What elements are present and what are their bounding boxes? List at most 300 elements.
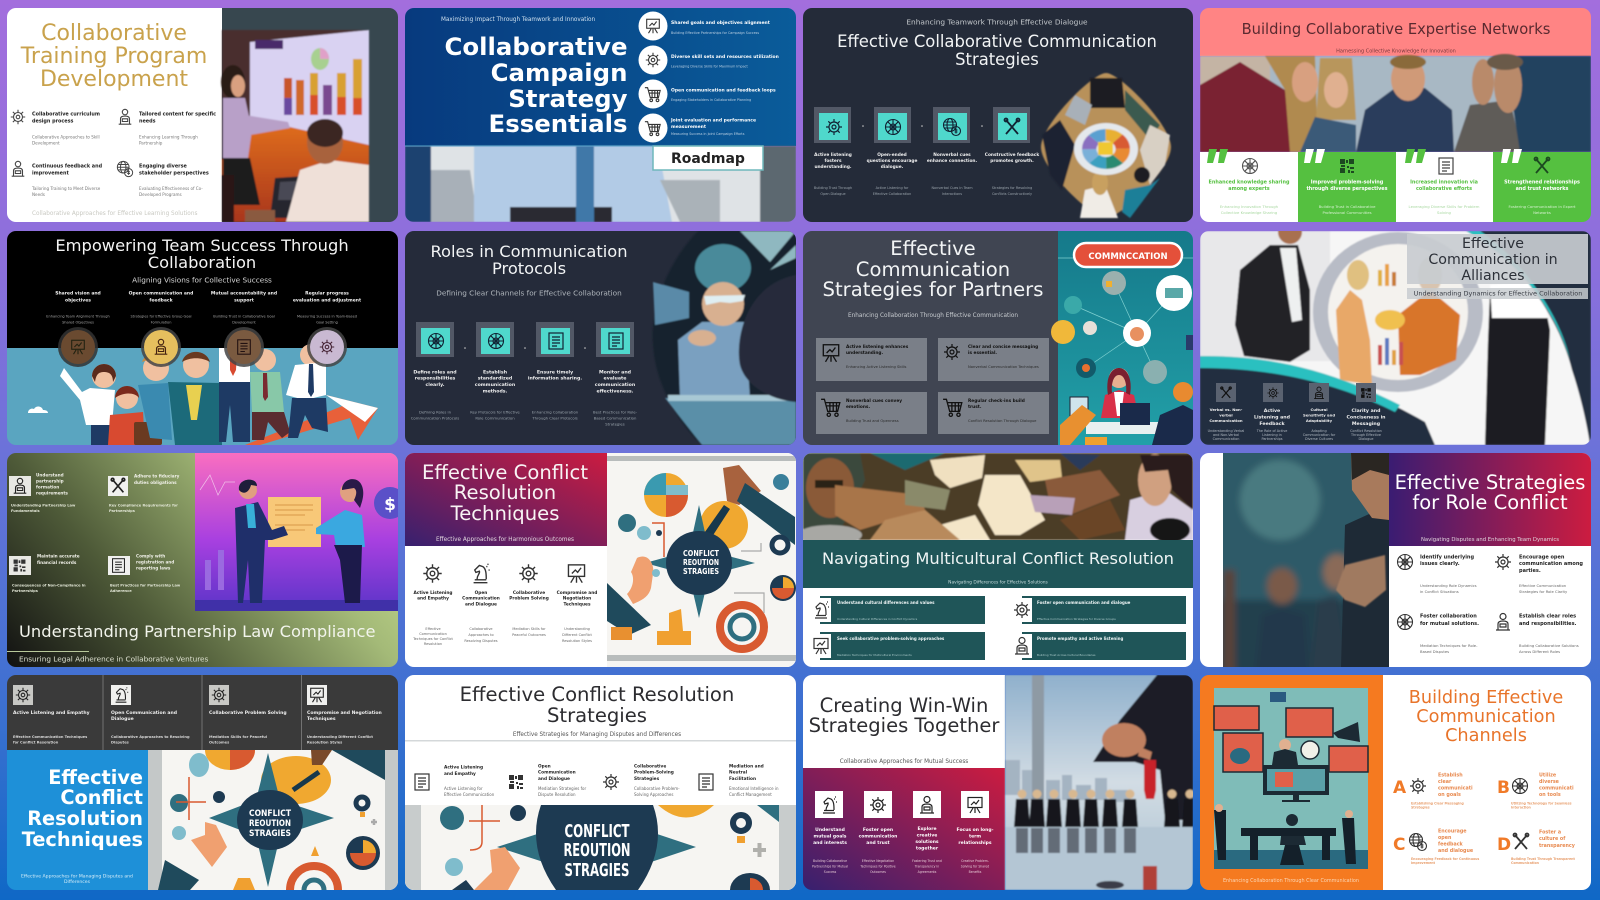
column text: Nonverbal Cues in Team (931, 186, 973, 190)
compliance items: partnership (36, 478, 64, 484)
column text: Shared Objectives (62, 320, 94, 324)
compliance items: Fundamentals (11, 509, 40, 513)
subtitle: Effective Strategies for Managing Disputes and Differences (513, 732, 681, 738)
card 16: Building Effective Communication Channels (1200, 675, 1591, 890)
strategy boxes: is essential. (968, 350, 997, 356)
quote panels: Improved problem-solving (1311, 180, 1384, 186)
feature list: Enhancing Learning Through (139, 134, 198, 140)
strategy items: and Empathy (444, 771, 476, 777)
column text: communication (475, 382, 515, 388)
technique columns: Collaborative (469, 627, 493, 631)
column text: Monitor and (599, 370, 631, 376)
technique columns: Resolution Styles (562, 639, 592, 643)
technique columns: Communication (462, 596, 500, 602)
roadmap sign (653, 146, 763, 170)
column items: Clarity and (1352, 408, 1380, 414)
column items: Verbal vs. Non- (1210, 407, 1243, 412)
subtitle bar (1407, 288, 1588, 299)
gradient panel with items: Benefits (969, 870, 982, 874)
column items: The Role of Active (1256, 429, 1287, 433)
title: Strategy (508, 84, 628, 113)
strategy bars (811, 596, 1186, 660)
strategy items: Active Listening for (444, 786, 483, 791)
column items: Adaptability (1306, 418, 1333, 423)
column text: Key Protocols for Effective (470, 410, 520, 414)
title: Communication (856, 258, 1010, 281)
feature list with circular icons: Diverse skill sets and resources utilization (671, 54, 779, 60)
column text (814, 152, 1039, 196)
card 8: Effective Communication in Alliances (1200, 220, 1591, 445)
quote panels: Leveraging Diverse Skills for Problem (1409, 204, 1480, 209)
compliance items: formation (36, 484, 59, 490)
strategy bars: Understanding Cultural Differences in Conflict Dynamics (837, 617, 918, 621)
quote panels: Solving (1437, 210, 1452, 215)
card 15: Creating Win-Win Strategies Together (803, 675, 1194, 890)
title: Effective Conflict (422, 461, 588, 484)
technique columns: Resolution (424, 642, 442, 646)
gradient panel with items: and trust (866, 840, 891, 846)
title: Strategies for Partners (823, 278, 1043, 301)
title box: Communication in (1428, 252, 1558, 268)
column items: Adapting (1311, 429, 1327, 433)
technique columns: Collaborative (513, 590, 545, 596)
title (20, 21, 207, 92)
strategy boxes: Nonverbal cues convey (846, 398, 902, 404)
title (422, 461, 588, 525)
illustration: conflict compass: STRAGIES (683, 567, 719, 576)
strategy items: Conflict Management (729, 792, 772, 797)
gradient panel with items: Partnerships for Mutual (812, 864, 848, 868)
lettered items: culture of (1539, 836, 1566, 842)
strategy boxes: Enhancing Active Listening Skills (846, 365, 907, 369)
column text (46, 290, 362, 324)
column text: Strategies (605, 422, 625, 426)
compliance items: Consequences of Non-Compliance in (12, 584, 86, 588)
lettered items: Building Trust Through Transparent (1511, 857, 1575, 861)
title (1409, 688, 1563, 746)
illustration: communication network (1051, 231, 1193, 445)
feature list: improvement (32, 170, 69, 176)
lettered items: Establishing Clear Messaging (1411, 802, 1464, 806)
title: Essentials (489, 109, 628, 138)
title (837, 32, 1157, 69)
lettered items: open (1438, 836, 1452, 841)
technique columns: Resolving Disputes (464, 639, 498, 643)
strategy items: Strategies for Role Clarity (1519, 590, 1568, 594)
column text: evaluation and adjustment (293, 298, 362, 304)
column items: Conflict Resolution (1350, 429, 1382, 433)
strategy bars: Foster open communication and dialogue (1037, 600, 1131, 605)
column text: Open communication and (129, 290, 193, 296)
top columns: Understanding Different Conflict (307, 735, 373, 739)
column text: Active listening (814, 152, 852, 158)
column text: Ensure timely (537, 370, 573, 376)
gradient panel with items: relationships (958, 840, 992, 846)
feature list with circular icons: Building Effective Partnerships for Campaign Success (671, 31, 759, 35)
gradient panel with items: Understand (815, 827, 845, 833)
feature list: Development (32, 140, 60, 146)
title: Techniques (450, 502, 559, 525)
illustration: cartoon team on arrow (28, 344, 378, 445)
goal icon badges (58, 327, 347, 367)
strategy items: for mutual solutions. (1420, 621, 1479, 627)
caption: Enhancing Collaboration Through Clear Communication (1223, 878, 1359, 884)
column text: support (234, 298, 255, 304)
technique columns: Techniques for Conflict (412, 637, 454, 641)
title (823, 237, 1043, 301)
strategy items: Strategies (634, 776, 660, 782)
communication pill sign: COMMNCCATION (1088, 252, 1168, 262)
strategy items: Building Collaborative Solutions (1519, 644, 1579, 648)
strategy boxes: emotions. (846, 404, 870, 410)
column text: Mutual accountability and (211, 290, 277, 296)
photo: woman with holographic helmet (653, 231, 796, 445)
top columns: Compromise and Negotiation (307, 710, 382, 716)
strategy boxes: Regular check-ins build (968, 398, 1025, 404)
top columns: Collaborative Approaches to Resolving (111, 735, 190, 739)
lettered items: on tools (1539, 792, 1561, 798)
column text: Formulation (151, 320, 171, 324)
feature list: Collaborative Approaches to Skill (32, 134, 100, 140)
strategy items: Foster collaboration (1420, 614, 1477, 620)
photo: colleagues around table (1200, 54, 1591, 152)
lettered items: on goals (1438, 792, 1461, 798)
title (56, 239, 348, 268)
header panel (1389, 453, 1591, 546)
column text: Through Clear Protocols (531, 416, 578, 420)
gradient panel with items: Creative Problem- (961, 859, 989, 863)
lettered items: Communication (1511, 861, 1540, 865)
column text: Building Trust Through (814, 186, 852, 190)
column text: Enhancing Team Alignment Through (46, 314, 110, 318)
blue title panel: Techniques (22, 828, 143, 851)
technique columns: and Empathy (417, 596, 449, 602)
technique columns: Techniques (563, 602, 591, 608)
column text: Role Communication (475, 416, 515, 420)
title: Understanding Partnership Law Compliance (19, 622, 376, 641)
column items: Listening and (1254, 414, 1290, 420)
feature list: needs (139, 118, 156, 124)
gradient panel with items: communication (859, 834, 897, 840)
top columns: Disputes (111, 740, 129, 744)
strategy boxes: Clear and concise messaging (968, 344, 1038, 350)
gradient panel with items: mutual goals (814, 834, 847, 840)
technique columns (412, 564, 597, 646)
lettered items: B (1497, 778, 1510, 798)
quote panels: Collective Knowledge Sharing (1221, 210, 1278, 215)
strategy items: Effective Communication (1519, 584, 1567, 588)
column text: Based Communication (594, 416, 637, 420)
blue title panel: Conflict (60, 786, 143, 809)
title box: Effective (1462, 236, 1524, 252)
title (432, 245, 626, 274)
strategy bars: Seek collaborative problem-solving approaches (837, 636, 945, 641)
feature list with circular icons: measurement (671, 124, 707, 130)
quote panels: collaborative efforts (1416, 186, 1472, 192)
title (809, 694, 1000, 737)
strategy boxes: trust. (968, 404, 982, 410)
quote panels: Professional Communities (1322, 210, 1372, 215)
gradient panel with items (803, 768, 1005, 890)
icon tiles (814, 107, 1030, 143)
gradient panel with items: creative (917, 832, 937, 838)
feature list: stakeholder perspectives (139, 170, 209, 176)
gradient panel with items: and interests (813, 840, 847, 846)
illustration: handshake over agreement (195, 453, 406, 611)
column items: Cultural (1310, 407, 1328, 412)
strategy items: Facilitation (729, 776, 756, 782)
column text: Measuring Success in Team-Based (297, 314, 357, 318)
subtitle: Enhancing Collaboration Through Effective Communication (848, 313, 1018, 319)
quote panels: Networks (1533, 210, 1551, 215)
compliance items: Key Compliance Requirements for (109, 504, 178, 508)
column text: Open-ended (877, 152, 907, 158)
column text: Strategies for Resolving (992, 186, 1032, 190)
communication pill sign (1074, 243, 1182, 267)
title: Creating Win-Win (820, 694, 988, 717)
column text: Goal Setting (316, 320, 338, 324)
compliance items: Adherence (110, 589, 132, 593)
column text: Open Dialogue (820, 192, 846, 196)
lettered items: Improvement (1411, 861, 1436, 865)
column text: effectiveness. (597, 388, 634, 394)
lettered items: Foster a (1539, 830, 1561, 836)
illustration: handshake over agreement: $ (384, 495, 396, 515)
column items: Diverse Cultures (1305, 437, 1333, 441)
column items: and Non-Verbal (1213, 433, 1239, 437)
compliance items (9, 472, 181, 593)
feature list with circular icons (638, 12, 779, 142)
title: for Role Conflict (1412, 491, 1568, 514)
feature list with circular icons: Shared goals and objectives alignment (671, 20, 771, 26)
photo: team circle around wheel (1041, 73, 1171, 218)
column text: promotes growth. (990, 158, 1034, 164)
lettered items: Interaction (1511, 806, 1532, 810)
strategy bars: Understand cultural differences and values (837, 600, 935, 605)
top columns (13, 675, 382, 750)
feature list (11, 109, 216, 197)
column items: Communication (1213, 437, 1239, 441)
technique columns: Effective (425, 627, 441, 631)
column text: Active Listening for (876, 186, 909, 190)
quote panels: Enhancing Innovation Through (1220, 204, 1279, 209)
strategy items: communication among (1519, 561, 1583, 567)
title band: Navigating Multicultural Conflict Resolution (822, 549, 1174, 568)
lettered items: Strategies (1411, 806, 1430, 810)
card 14: Effective Conflict Resolution Strategies (405, 675, 796, 890)
column text: fosters (824, 158, 842, 164)
illustration: enlarged conflict compass (405, 805, 796, 890)
technique columns: and Dialogue (465, 602, 497, 608)
quote panels: Strengthened relationships (1504, 180, 1580, 186)
illustration: conflict compass: STRAGIES (249, 829, 291, 839)
illustration: control room of screens (1214, 688, 1368, 869)
title: Communication (1416, 707, 1556, 727)
gradient panel with items: Transparency in (914, 864, 939, 868)
title band: Navigating Differences for Effective Solutions (948, 580, 1049, 586)
strategy items: Communication (538, 770, 576, 776)
lettered items: C (1393, 835, 1405, 855)
title: Collaboration (148, 253, 256, 272)
strategy items (1398, 554, 1583, 654)
top columns: Collaborative Problem Solving (209, 710, 287, 716)
strategy boxes: Building Trust and Openness (846, 419, 899, 423)
column items: Sensitivity and (1303, 412, 1335, 418)
strategy boxes: Conflict Resolution Through Dialogue (968, 419, 1037, 423)
card 13: Effective Conflict Resolution Techniques, blue variant (7, 675, 398, 890)
top columns: Effective Communication Techniques (13, 735, 87, 739)
strategy items: Across Different Roles (1519, 650, 1560, 654)
title (460, 683, 734, 727)
strategy items: Dispute Resolution (538, 792, 576, 797)
column text: clearly. (425, 382, 445, 388)
quote panels: and trust networks (1516, 186, 1568, 192)
column items: Conciseness in (1346, 414, 1386, 420)
column text: enhance connection. (927, 158, 977, 164)
strategy items: Mediation and (729, 764, 764, 770)
title: Campaign (491, 58, 628, 87)
strategy items: Collaborative (634, 764, 666, 770)
card 3: Effective Collaborative Communication Strategies (803, 8, 1193, 222)
strategy items: parties. (1519, 568, 1541, 574)
title: Collaborative (41, 21, 187, 46)
strategy items: Solving Approaches (634, 792, 673, 797)
column items: Messaging (1352, 421, 1380, 427)
strategy items (415, 764, 779, 797)
compliance items: Understand (36, 472, 64, 478)
gradient panel with items: Success (824, 870, 837, 874)
feature list: Tailoring Training to Meet Diverse (31, 186, 101, 191)
subtitle: Aligning Visions for Collective Success (132, 276, 272, 284)
strategy boxes: Nonverbal Communication Techniques (968, 365, 1039, 369)
strategy items: Emotional Intelligence in (729, 786, 779, 791)
column text: Development (232, 320, 256, 324)
strategy items: Understanding Role Dynamics (1420, 584, 1477, 588)
title: Building Effective (1409, 688, 1563, 708)
column text: Best Practices for Role- (593, 410, 638, 414)
strategy bars: Promote empathy and active listening (1037, 636, 1123, 641)
subtitle: Enhancing Teamwork Through Effective Dialogue (906, 18, 1088, 26)
top columns: for Conflict Resolution (13, 740, 59, 744)
title (1395, 471, 1585, 514)
gradient panel with items: Building Collaborative (813, 859, 847, 863)
strategy items: Establish clear roles (1519, 614, 1576, 620)
title: Strategies Together (809, 714, 1000, 737)
strategy bars: Building Trust Across Cultural Boundaries (1037, 653, 1096, 657)
subtitle: Maximizing Impact Through Teamwork and Innovation (441, 17, 596, 23)
lettered items: communicati (1539, 786, 1574, 792)
lettered items (1393, 772, 1576, 865)
quote panels: Fostering Communication in Expert (1508, 204, 1576, 209)
column text: Shared vision and (55, 290, 101, 296)
lettered items: Utilize (1539, 772, 1557, 778)
technique columns: Problem Solving (509, 596, 549, 602)
column text: understanding. (814, 164, 852, 170)
column text: responsibilities (415, 376, 455, 382)
technique columns: Negotiation (563, 596, 591, 602)
column text: Defining Roles in (419, 410, 452, 414)
strategy items: issues clearly. (1420, 561, 1460, 567)
column items: verbal (1219, 412, 1233, 418)
illustration: conflict compass (148, 750, 398, 890)
strategy items: Based Disputes (1420, 650, 1449, 654)
strategy items: in Conflict Situations (1420, 590, 1459, 594)
lettered items: diverse (1539, 779, 1560, 785)
illustration: conflict compass: CONFLICT (249, 809, 292, 819)
column text: Regular progress (305, 290, 349, 296)
quote panels: Increased innovation via (1410, 180, 1478, 186)
strategy items: Active Listening (444, 764, 483, 770)
lettered items: communicati (1438, 786, 1473, 792)
gradient panel with items: Explore (917, 826, 937, 832)
technique columns: Compromise and (557, 590, 597, 596)
title: Development (40, 67, 188, 92)
top columns: Mediation Skills for Peaceful (209, 735, 267, 739)
title: Roles in Communication (430, 242, 628, 261)
column items: Understanding Verbal (1208, 429, 1244, 433)
top columns: Techniques (307, 716, 336, 722)
strategy bars: Mediation Techniques for Multicultural Environments (837, 653, 912, 657)
illustration: conflict compass (607, 453, 796, 667)
column text: Nonverbal cues (933, 152, 971, 158)
blue title panel (7, 750, 148, 890)
feature list: design process (32, 118, 73, 124)
blue title panel: Effective Approaches for Managing Disputes and (21, 874, 133, 880)
lettered items: clear (1438, 779, 1452, 785)
feature list with circular icons: Open communication and feedback loops (671, 88, 776, 94)
strategy items: Identify underlying (1420, 554, 1474, 560)
column text: Constructive feedback (985, 152, 1039, 158)
feature list with circular icons: Joint evaluation and performance (670, 118, 756, 124)
column text: questions encourage (867, 158, 917, 164)
column items: Listening in (1262, 433, 1282, 437)
top columns: Outcomes (209, 740, 229, 744)
title: Effective (890, 237, 976, 260)
quote panels: Building Trust in Collaborative (1319, 204, 1376, 209)
top columns: Active Listening and Empathy (13, 710, 90, 716)
card 4: Building Collaborative Expertise Networks (1200, 8, 1591, 222)
compliance items: Understanding Partnership Law (11, 504, 76, 508)
title: Effective Strategies (1395, 471, 1585, 494)
technique columns: Approaches to (468, 633, 494, 637)
column text: Establish (483, 370, 507, 376)
title band (803, 540, 1193, 588)
quote panels: Enhanced knowledge sharing (1209, 180, 1290, 186)
subtitle: Collaborative Approaches for Mutual Success (840, 759, 968, 765)
title: Effective Conflict Resolution (460, 683, 734, 706)
title: Building Collaborative Expertise Networks (1242, 21, 1550, 38)
column text: objectives (65, 298, 91, 304)
card 5: Empowering Team Success Through Collaboration (7, 231, 398, 445)
blue title panel: Differences (64, 879, 91, 885)
strategy items: and responsibilities. (1519, 621, 1577, 627)
lettered items: Establish (1438, 772, 1463, 778)
lettered items: and dialogue (1438, 848, 1474, 854)
column text: Conflicts Constructively (992, 192, 1032, 196)
compliance items: reporting laws (136, 566, 171, 570)
technique columns: Different Conflict (562, 633, 592, 637)
blue title panel: Effective (48, 766, 143, 789)
subtitle bar: Understanding Dynamics for Effective Collaboration (1414, 290, 1582, 298)
top columns: Dialogue (111, 716, 134, 722)
feature list: Evaluating Effectiveness of Co- (139, 186, 203, 191)
gradient panel with items: Techniques for Positive (859, 864, 896, 868)
title box (1407, 234, 1588, 284)
compliance items: Partnerships (12, 589, 38, 593)
gradient panel with items: term (969, 834, 981, 840)
column items: Feedback (1259, 421, 1285, 427)
gradient panel with items: Solving for Shared (961, 864, 989, 868)
